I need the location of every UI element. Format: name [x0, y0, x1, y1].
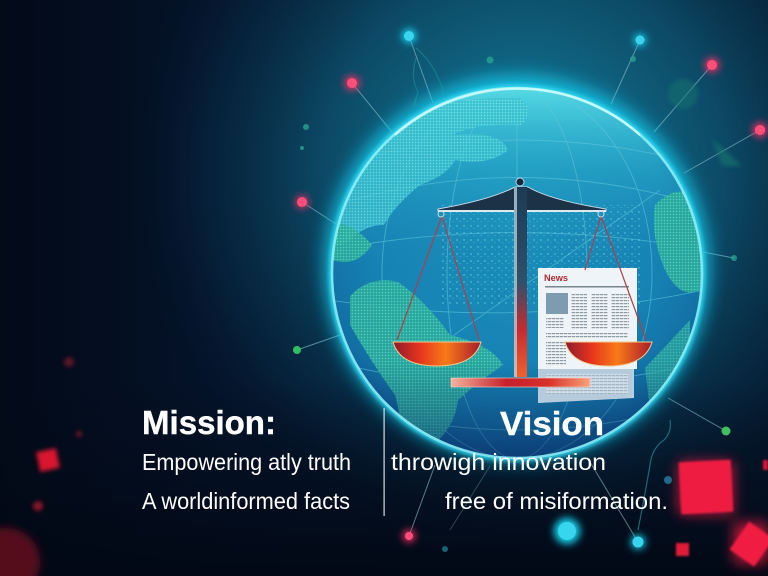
grid lines	[330, 87, 704, 459]
vision column	[391, 405, 668, 514]
divider	[384, 408, 385, 516]
connection lines and nodes	[293, 29, 767, 552]
east land	[654, 192, 701, 292]
vision line 2: free of misiformation.	[445, 488, 668, 514]
red squares and bokeh	[0, 357, 768, 576]
scale pole	[514, 187, 527, 377]
balance scale	[393, 178, 652, 387]
globe	[318, 76, 709, 461]
mission column	[142, 404, 351, 514]
scale base	[451, 378, 590, 387]
newspaper masthead: News	[544, 273, 568, 283]
vision heading: Vision	[500, 405, 604, 442]
north america land	[340, 98, 528, 232]
glowing node dots	[293, 29, 767, 552]
scale chains	[397, 216, 646, 340]
vision line 1: throwigh innovation	[391, 449, 606, 475]
mission line 2: A worldinformed facts	[142, 488, 350, 514]
south america land	[350, 280, 503, 456]
scale beam	[438, 187, 606, 211]
right pan	[565, 342, 652, 366]
globe surface and continents	[318, 86, 704, 460]
left pan	[393, 342, 481, 366]
mission heading: Mission:	[142, 404, 276, 441]
newspaper	[538, 268, 637, 403]
mission line 1: Empowering atly truth	[142, 449, 351, 475]
